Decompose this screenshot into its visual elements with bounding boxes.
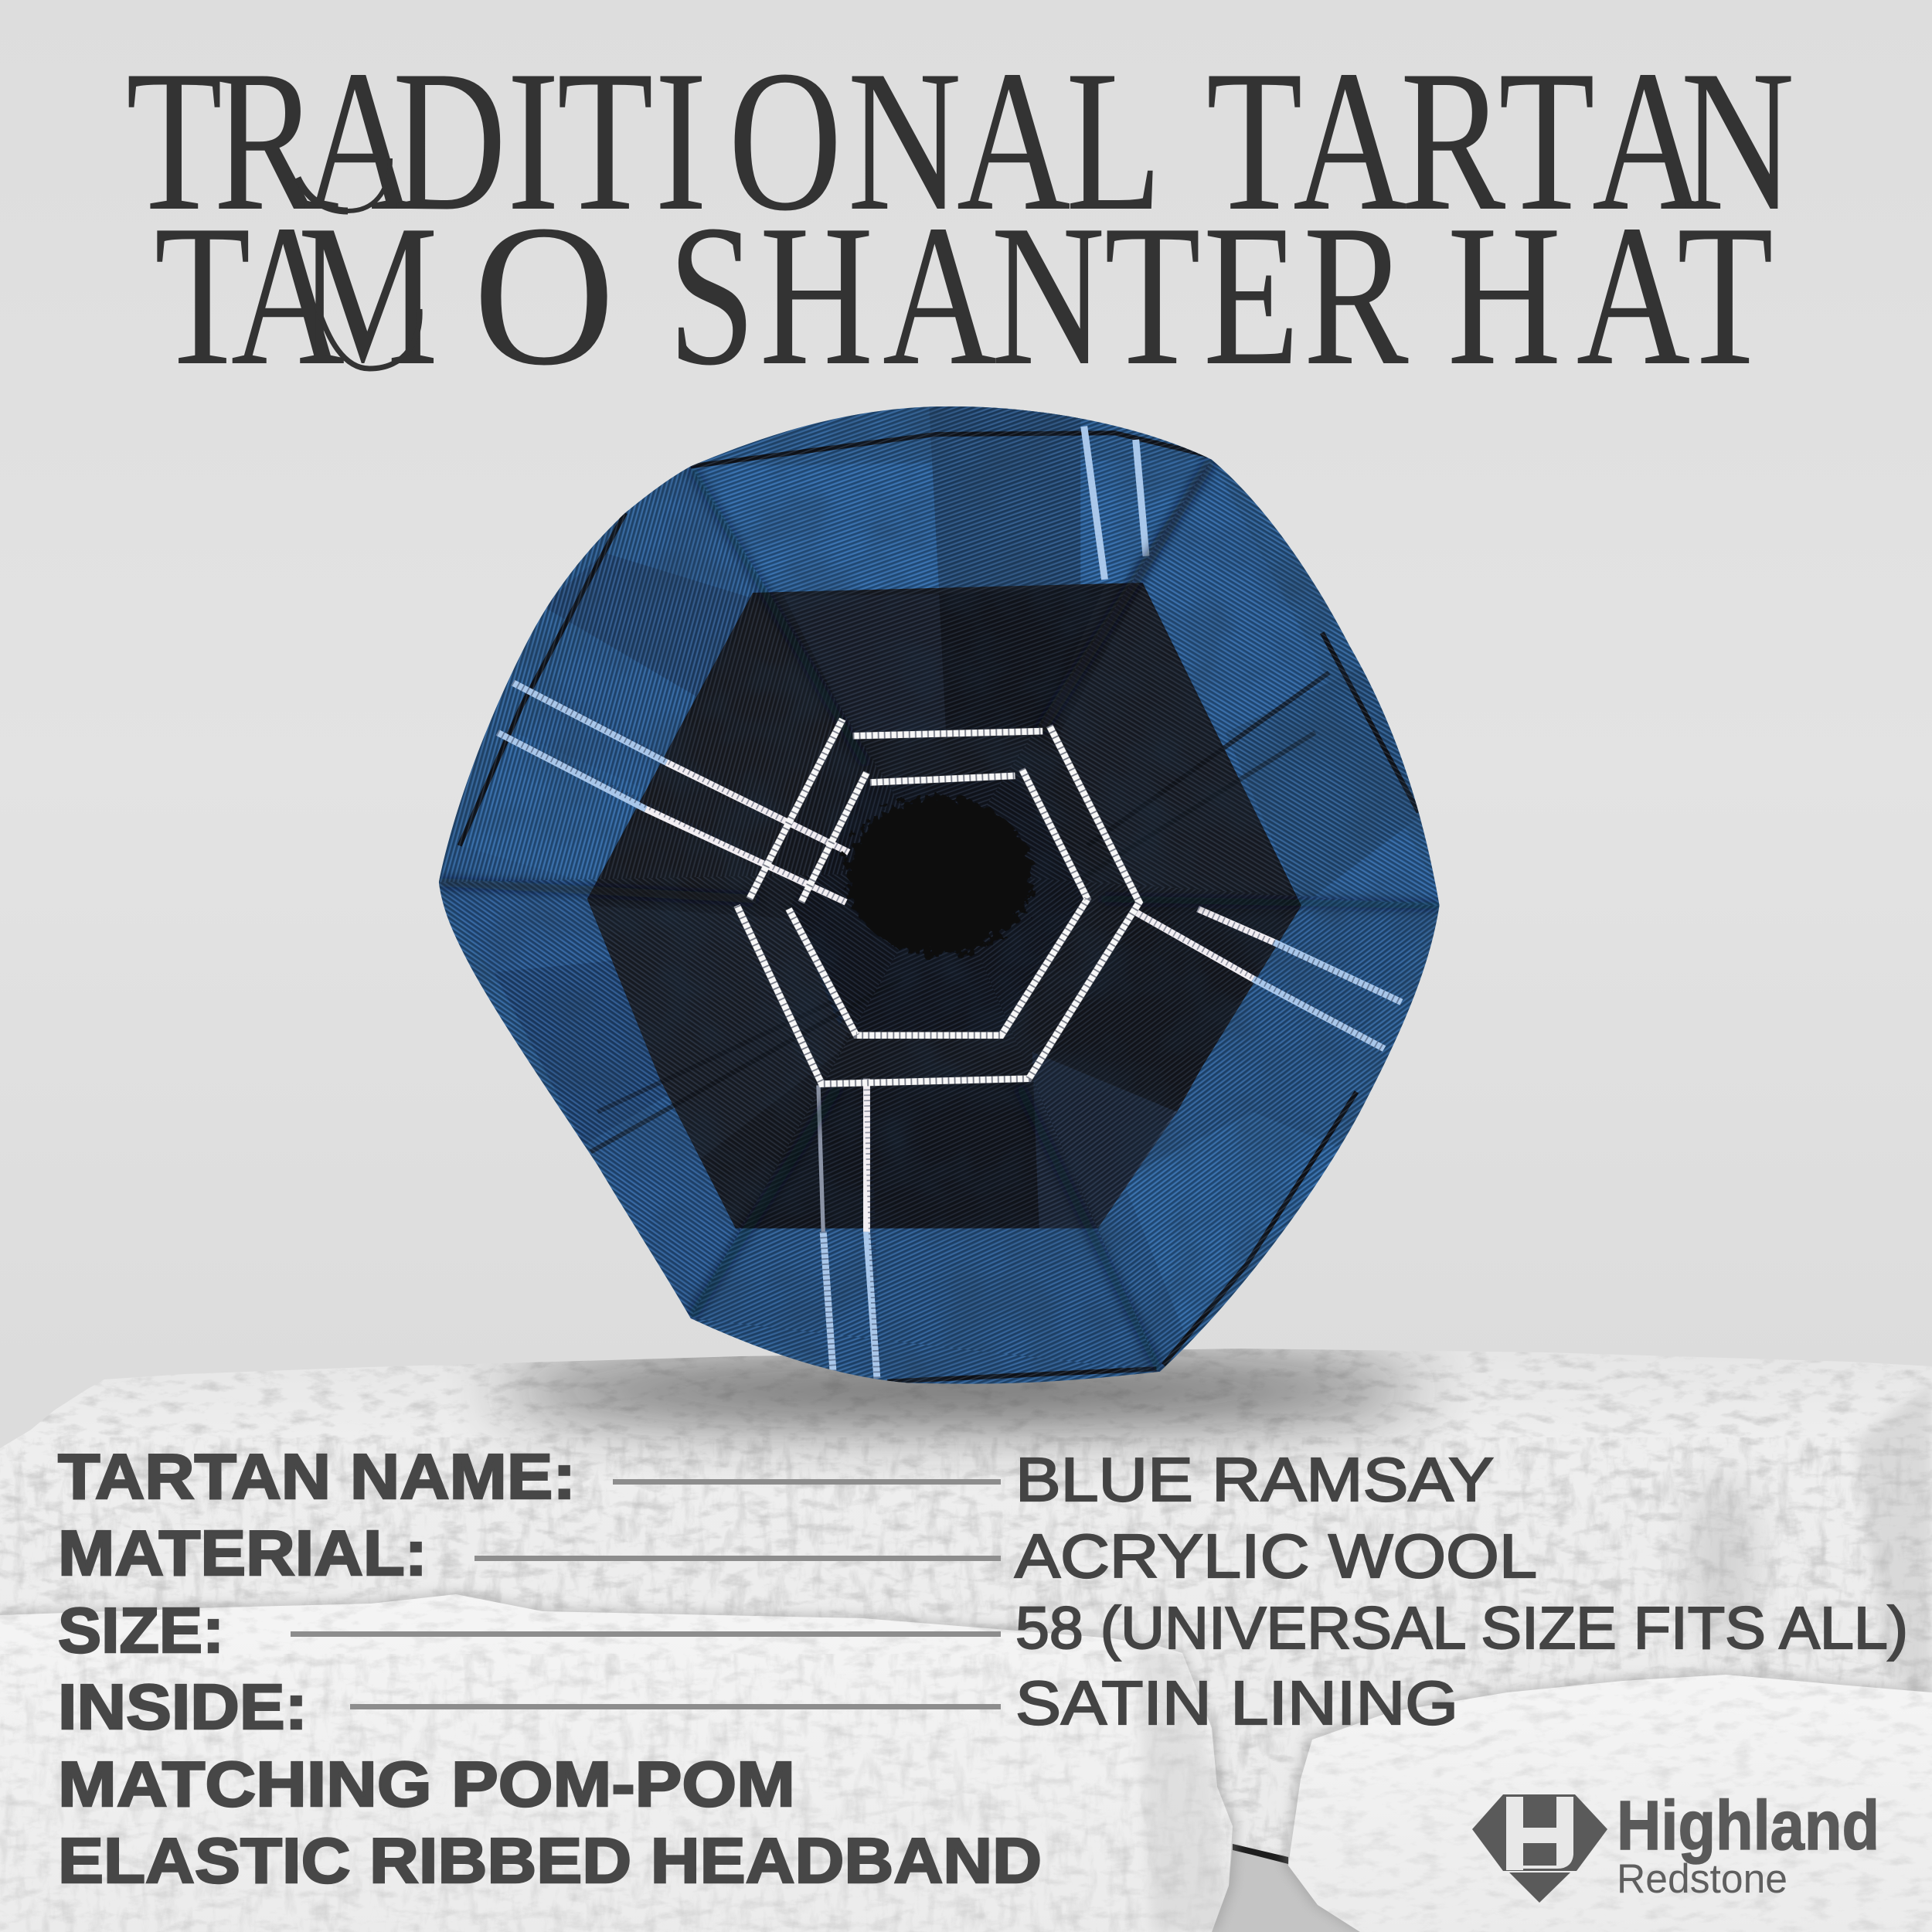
shadow of hat on slab [498, 1363, 1425, 1419]
rear stone slab [0, 1349, 1932, 1866]
title [126, 29, 1794, 407]
dark panel tones [590, 586, 1294, 1229]
logo [1472, 1787, 1879, 1903]
title: SHANTER [668, 183, 1409, 407]
hexagon stripes of headband opening [737, 719, 1139, 1084]
spec: tartan name: BLUE RAMSAY [1015, 1445, 1494, 1514]
spec: tartan name [58, 1440, 1494, 1514]
fold shading [439, 460, 1440, 1372]
floor between stones [1212, 1844, 1360, 1932]
spec: size: 58 (UNIVERSAL SIZE FITS ALL) [1015, 1595, 1908, 1662]
dark centre hexagon [587, 583, 1301, 1229]
title: TARTAN [1206, 29, 1794, 253]
tartan hat [439, 406, 1439, 1384]
spec: material: ACRYLIC WOOL [1015, 1522, 1537, 1590]
title: TRADITIONAL [126, 29, 1162, 253]
black tartan lines [460, 433, 1419, 1382]
title: O [473, 183, 615, 407]
feature: matching pom-pom: MATCHING POM-POM [58, 1748, 795, 1820]
spec: inside: INSIDE: [58, 1671, 308, 1743]
charcoal deepening of centre [587, 583, 1301, 1229]
contact shadow of front stones [0, 1590, 1932, 1932]
spec: size [58, 1594, 1908, 1666]
spec rows [58, 1440, 1908, 1896]
spec: size: SIZE: [58, 1594, 224, 1666]
feature: elastic ribbed headband: ELASTIC RIBBED HEADBAND [58, 1825, 1042, 1896]
pom-pom [846, 796, 1032, 955]
twill weave by panel [425, 386, 1460, 1398]
spec: material: MATERIAL: [58, 1517, 427, 1589]
tartan stripes [498, 427, 1401, 1378]
blue panel tones [439, 400, 1446, 1385]
fabric mottling [425, 386, 1460, 1398]
icon: HL diamond [1472, 1794, 1607, 1903]
stone plinths [0, 1314, 1932, 1932]
wordmark: Redstone: Redstone [1617, 1856, 1787, 1902]
spec: inside: SATIN LINING [1015, 1668, 1458, 1737]
spec: material [58, 1517, 1537, 1590]
front-right stone [1283, 1669, 1932, 1932]
front-left stone [0, 1592, 1267, 1932]
spec: tartan name: TARTAN NAME: [58, 1440, 576, 1512]
title: HAT [1447, 183, 1774, 407]
title: TAM [155, 183, 438, 407]
wordmark: Highland: Highland [1617, 1787, 1879, 1865]
dark gap under rear slab [1233, 1844, 1288, 1864]
spec: inside [58, 1668, 1458, 1743]
